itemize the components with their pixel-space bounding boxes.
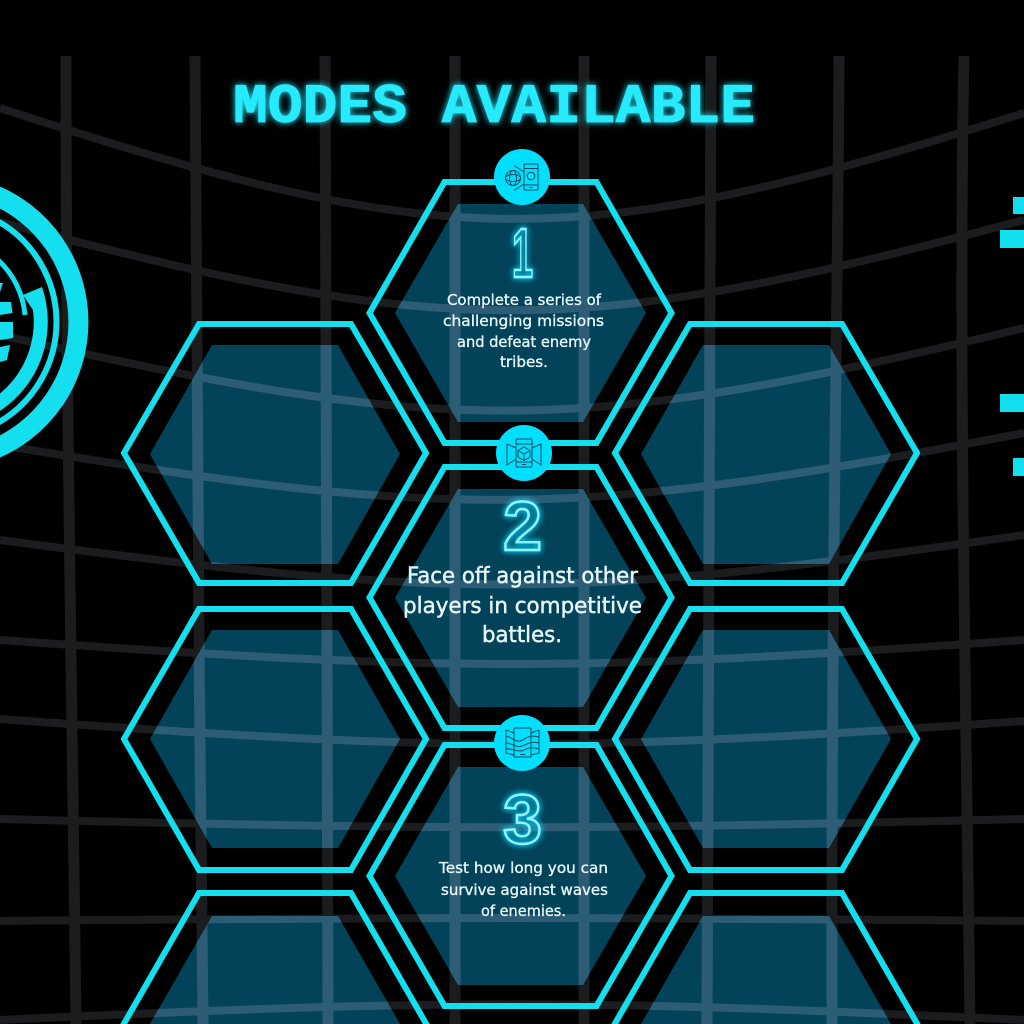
panel: mode 3 — [366, 742, 675, 1009]
panel: mode 2 — [366, 464, 675, 731]
number 1: 1 — [512, 214, 533, 292]
empty hexagon: right row 1 — [612, 321, 920, 586]
mode 3 description — [438, 859, 608, 920]
number 3: 3 — [503, 780, 542, 858]
mode 1 description: and defeat enemy — [457, 333, 591, 351]
empty hexagon: left row 2 — [120, 606, 430, 873]
mode 3 description: survive against waves — [441, 881, 608, 899]
mode 1 description: tribes. — [500, 353, 548, 371]
right edge tabs — [1000, 197, 1024, 476]
mode 1 description: Complete a series of — [447, 291, 602, 309]
mode 2 description: players in competitive — [403, 594, 642, 619]
mode 1 description: challenging missions — [443, 312, 604, 330]
number 2: 2 — [503, 487, 542, 565]
mode 2 description: Face off against other — [407, 564, 639, 589]
mode 2 description: battles. — [482, 623, 562, 648]
icon: globe and phone — [494, 149, 550, 205]
mode 1 description — [443, 291, 604, 371]
empty hexagon: left row 3 — [120, 890, 430, 1024]
panel: mode 1 — [366, 179, 675, 446]
title: MODES AVAILABLE — [233, 75, 755, 139]
mode 3 description: of enemies. — [481, 902, 566, 920]
empty hexagon: right row 3 — [611, 890, 921, 1024]
mode 2 description — [403, 564, 642, 648]
empty hexagon: right row 2 — [612, 606, 920, 873]
empty hexagon: left row 1 — [120, 321, 430, 586]
icon: phone with map — [494, 715, 550, 771]
mode 3 description: Test how long you can — [438, 859, 608, 877]
decorative radar dial — [0, 193, 78, 451]
icon: phone with cube — [496, 425, 552, 481]
